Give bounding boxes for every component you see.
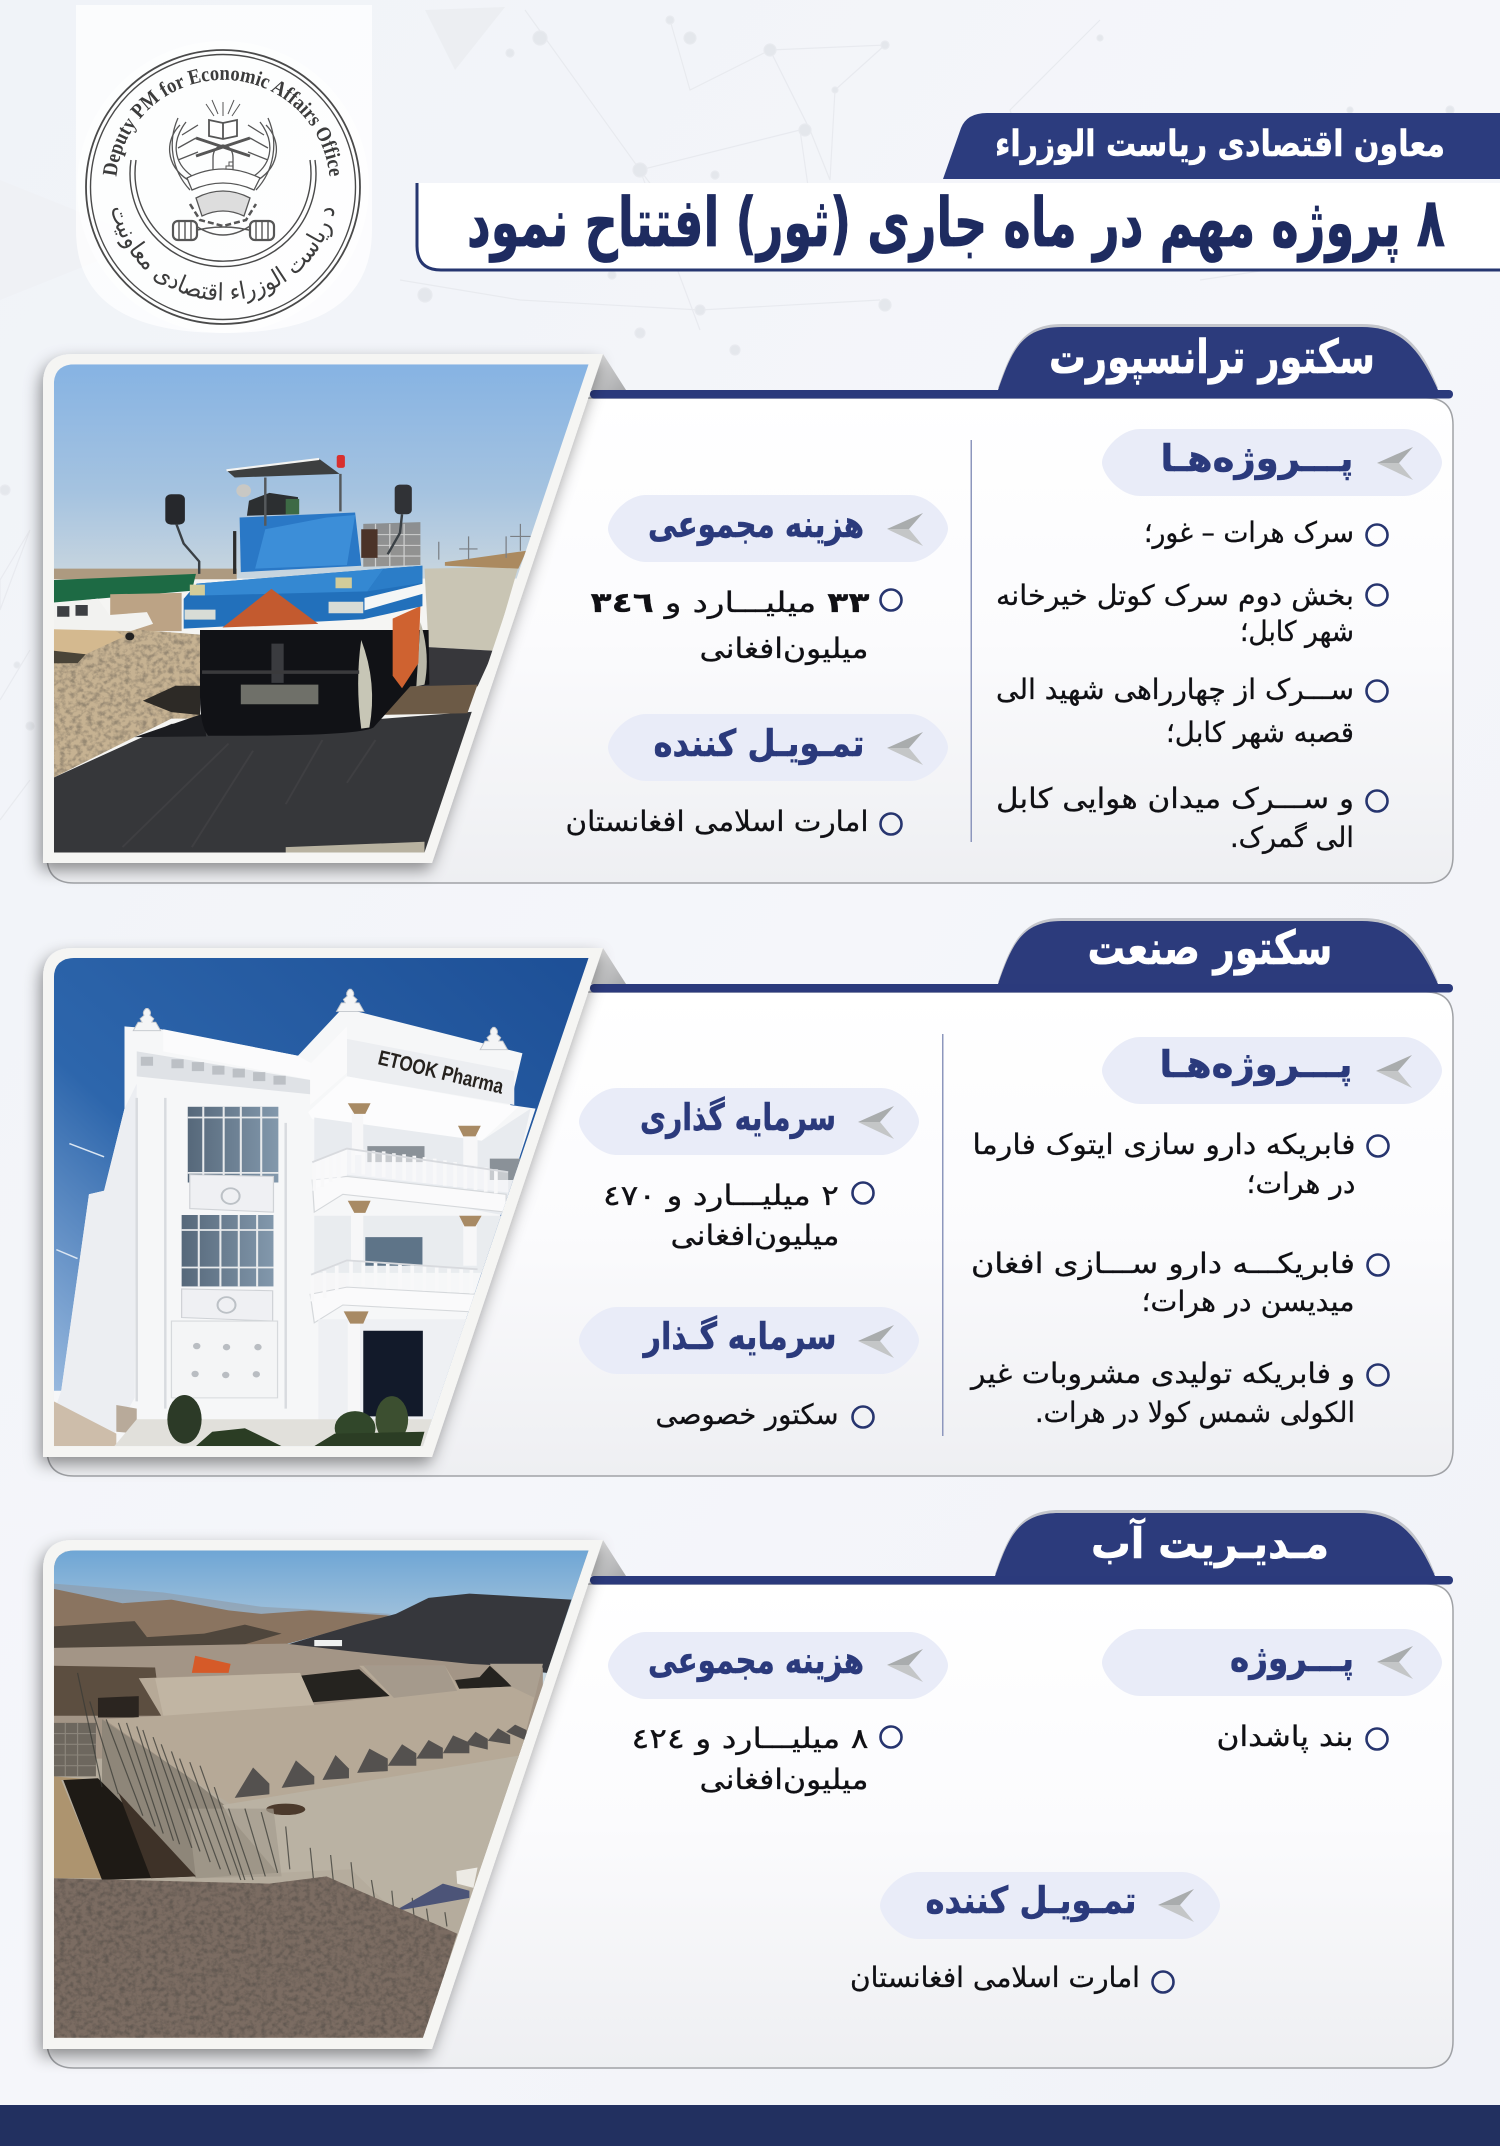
column divider <box>942 1034 944 1436</box>
projects pill: پـــروژه‌هـا <box>1160 437 1354 480</box>
photo frame <box>43 1540 603 2049</box>
water header tab <box>590 1510 1453 1584</box>
projects pill <box>1102 1037 1442 1104</box>
investment value: میلیون‌افغانی <box>670 1219 840 1252</box>
photo: ETOOK Pharma building: ETOOK Pharma <box>376 1046 506 1099</box>
projects list: شهر کابل؛ <box>1240 615 1354 648</box>
panel: transport <box>47 398 1453 883</box>
photo frame <box>43 354 603 863</box>
projects list: فابریکه دارو سازی ایتوک فارما <box>972 1128 1356 1161</box>
photo: road roller on new asphalt <box>54 364 593 852</box>
financer pill: تمـویـل کننده <box>926 1879 1136 1922</box>
investment value <box>603 1179 874 1252</box>
financer pill <box>608 714 948 781</box>
projects pill: پـــروژه‌هـا <box>1160 1043 1352 1086</box>
total cost value <box>590 586 902 665</box>
projects list: سرک هرات – غور؛ <box>1144 516 1354 549</box>
photo: Pashdan dam construction <box>54 1550 593 2040</box>
seal bottom text: د ریاست الوزراء اقتصادی معاونیت <box>112 208 334 304</box>
seal top text: Deputy PM for Economic Affairs Office <box>102 68 340 176</box>
projects list: در هرات؛ <box>1246 1167 1356 1200</box>
transport header tab <box>590 324 1453 398</box>
seal rings <box>86 50 360 324</box>
panel: industry <box>47 992 1453 1476</box>
financer pill <box>880 1872 1220 1939</box>
total cost value <box>632 1722 902 1796</box>
projects list: میدیسن در هرات؛ <box>1142 1285 1354 1318</box>
projects list: بخش دوم سرک کوتل خیرخانه <box>996 579 1354 612</box>
water header tab: مـدیـریت آب <box>1091 1518 1329 1569</box>
column divider <box>970 440 972 842</box>
industry header tab: سکتور صنعت <box>1088 921 1332 976</box>
logo: deputy PM seal <box>76 5 372 333</box>
panel: water <box>47 1584 1453 2068</box>
projects list: الی گمرک. <box>1230 821 1354 854</box>
investment value: ۲ میلیـــارد و ٤٧٠ <box>603 1179 839 1212</box>
industry header tab <box>590 918 1453 992</box>
investor value: سکتور خصوصی <box>656 1398 838 1431</box>
project value: بند پاشدان <box>1216 1720 1354 1753</box>
section: transport <box>43 324 1453 883</box>
projects list: و ســـرک میدان هوایی کابل <box>996 782 1354 815</box>
emblem <box>170 100 276 240</box>
projects list: فابریکـــه دارو ســـازی افغان <box>971 1247 1355 1280</box>
section: water management <box>43 1510 1453 2068</box>
financer pill: تمـویـل کننده <box>654 722 864 765</box>
total cost pill <box>608 495 948 562</box>
investment pill <box>579 1088 919 1155</box>
total cost value: میلیون‌افغانی <box>700 1763 868 1796</box>
projects list <box>996 516 1388 854</box>
photo: ETOOK Pharma building <box>54 958 593 1447</box>
total cost value: ۳۳ میلیـــارد و ۳٤٦ <box>590 586 870 619</box>
investment pill: سرمایه گذاری <box>640 1096 836 1139</box>
fold of photo frame <box>586 1540 626 1576</box>
projects list: ســـرک از چهارراهی شهید الی <box>996 673 1354 706</box>
header: office subtitle tab <box>943 113 1500 179</box>
white seal backing <box>76 5 372 333</box>
total cost value: ۸ میلیـــارد و ٤٢٤ <box>632 1722 868 1755</box>
projects list: قصبه شهر کابل؛ <box>1166 716 1354 749</box>
fold of photo frame <box>586 354 626 390</box>
project pill: پـــروژه <box>1230 1637 1354 1680</box>
investor pill: سرمایه گـذار <box>642 1315 836 1358</box>
footer band <box>0 2105 1500 2146</box>
total cost pill <box>608 1632 948 1699</box>
total cost pill: هزینه مجموعی <box>648 1639 864 1682</box>
photo frame <box>43 948 603 1457</box>
projects list: الکولی شمس کولا در هرات. <box>1035 1396 1355 1429</box>
projects list: و فابریکه تولیدی مشروبات غیر <box>969 1357 1355 1390</box>
projects list <box>969 1128 1388 1429</box>
section: industry <box>43 918 1453 1476</box>
fold of photo frame <box>586 948 626 984</box>
investor pill <box>579 1307 919 1374</box>
header: main title box <box>417 183 1500 270</box>
financer value: امارت اسلامی افغانستان <box>850 1961 1140 1994</box>
project pill <box>1102 1629 1442 1696</box>
financer value: امارت اسلامی افغانستان <box>566 805 868 838</box>
total cost pill: هزینه مجموعی <box>648 503 864 546</box>
projects pill <box>1102 429 1442 496</box>
total cost value: میلیون‌افغانی <box>700 632 868 665</box>
transport header tab: سکتور ترانسپورت <box>1049 330 1375 385</box>
background network pattern <box>0 7 1454 1064</box>
